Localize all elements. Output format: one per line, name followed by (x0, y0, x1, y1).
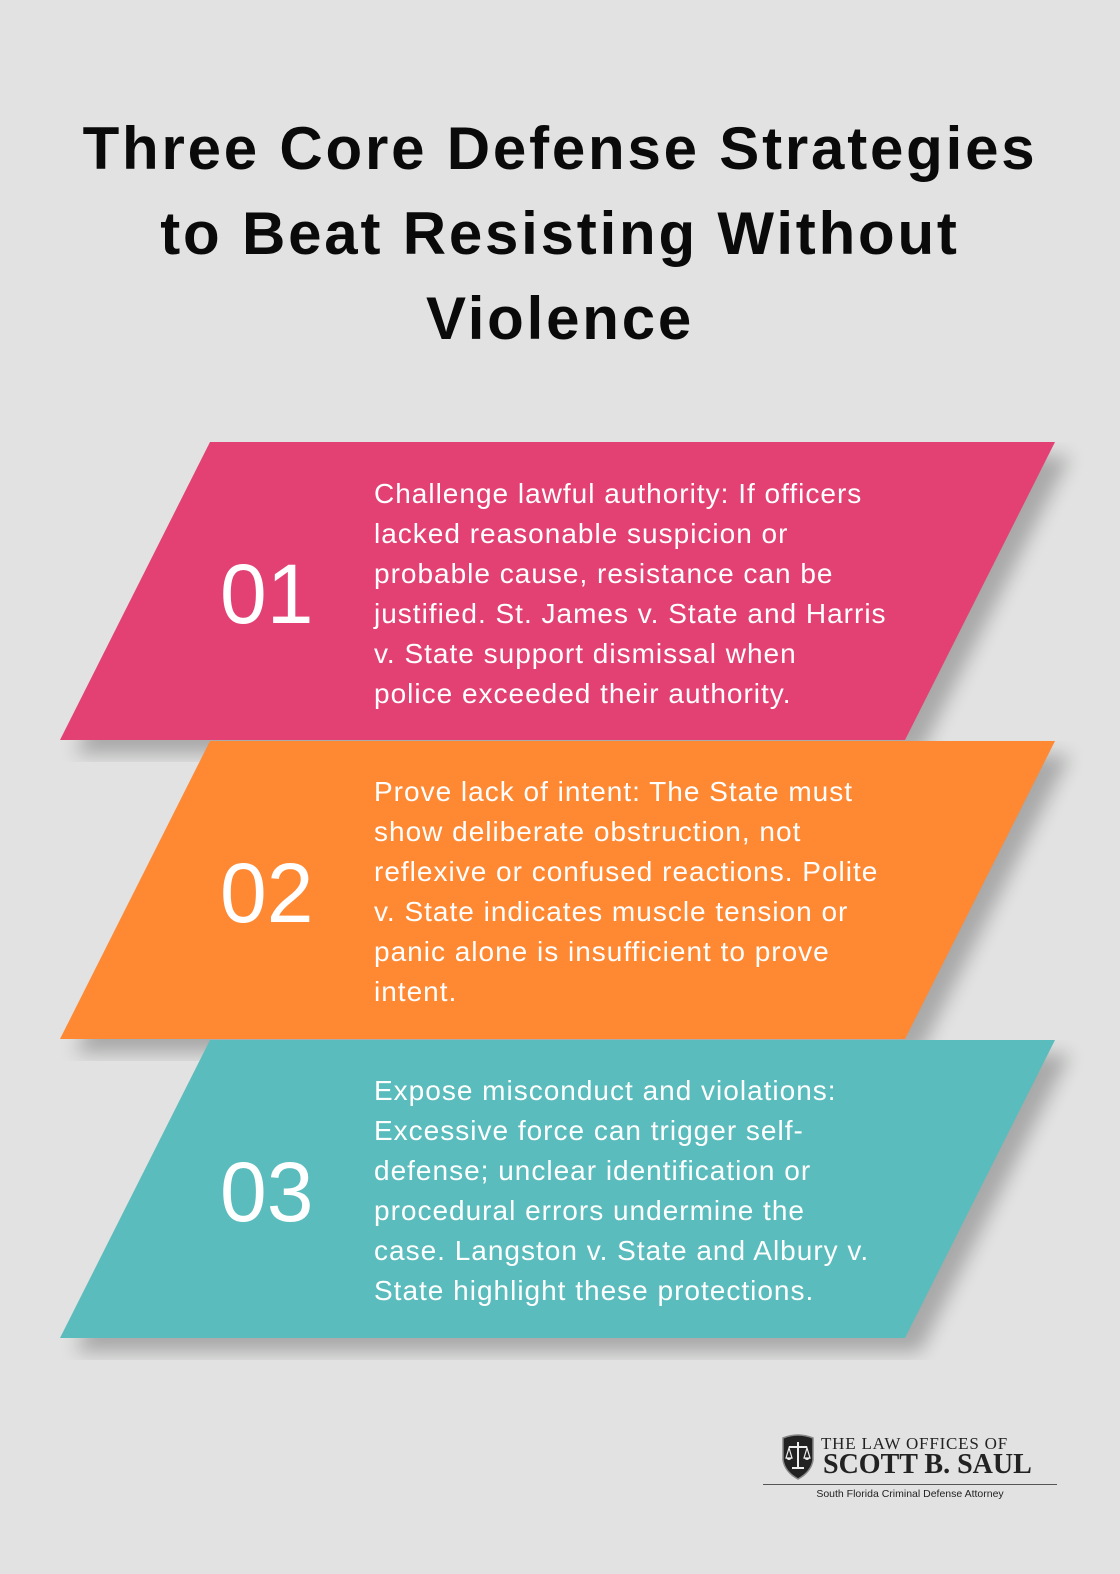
text 02: show deliberate obstruction, not (374, 816, 801, 847)
number 01: 01 (220, 547, 313, 641)
text 03: case. Langston v. State and Albury v. (374, 1235, 869, 1266)
text 02: intent. (374, 976, 457, 1007)
icon: shield with scales (782, 1434, 814, 1480)
text 01: lacked reasonable suspicion or (374, 518, 788, 549)
text 03: State highlight these protections. (374, 1275, 814, 1306)
text 01: v. State support dismissal when (374, 638, 797, 669)
number 02: 02 (220, 846, 313, 940)
text 02 (374, 776, 878, 1007)
panel: strategy 02 (60, 741, 1073, 1061)
text 03: Excessive force can trigger self- (374, 1115, 804, 1146)
text 01: Challenge lawful authority: If officers (374, 478, 862, 509)
text 01 (373, 478, 887, 709)
title: Violence (426, 285, 694, 352)
text 03: Expose misconduct and violations: (374, 1075, 837, 1106)
title (83, 115, 1037, 352)
logo: SCOTT B. SAUL (823, 1449, 1032, 1480)
logo: South Florida Criminal Defense Attorney (816, 1488, 1004, 1500)
panel: strategy 03 (60, 1040, 1073, 1360)
text 02: Prove lack of intent: The State must (374, 776, 853, 807)
text 02: reflexive or confused reactions. Polite (374, 856, 878, 887)
text 01: probable cause, resistance can be (374, 558, 834, 589)
text 03: procedural errors undermine the (374, 1195, 805, 1226)
text 01: police exceeded their authority. (374, 678, 792, 709)
text 02: panic alone is insufficient to prove (374, 936, 830, 967)
panel: strategy 01 (60, 442, 1073, 762)
text 03 (374, 1075, 869, 1306)
title: Three Core Defense Strategies (83, 115, 1037, 182)
number 03: 03 (220, 1145, 313, 1239)
logo: THE LAW OFFICES OF (821, 1434, 1008, 1453)
text 02: v. State indicates muscle tension or (374, 896, 848, 927)
text 03: defense; unclear identification or (374, 1155, 811, 1186)
text 01: justified. St. James v. State and Harris (374, 598, 887, 629)
title: to Beat Resisting Without (160, 200, 960, 267)
logo (763, 1434, 1057, 1500)
